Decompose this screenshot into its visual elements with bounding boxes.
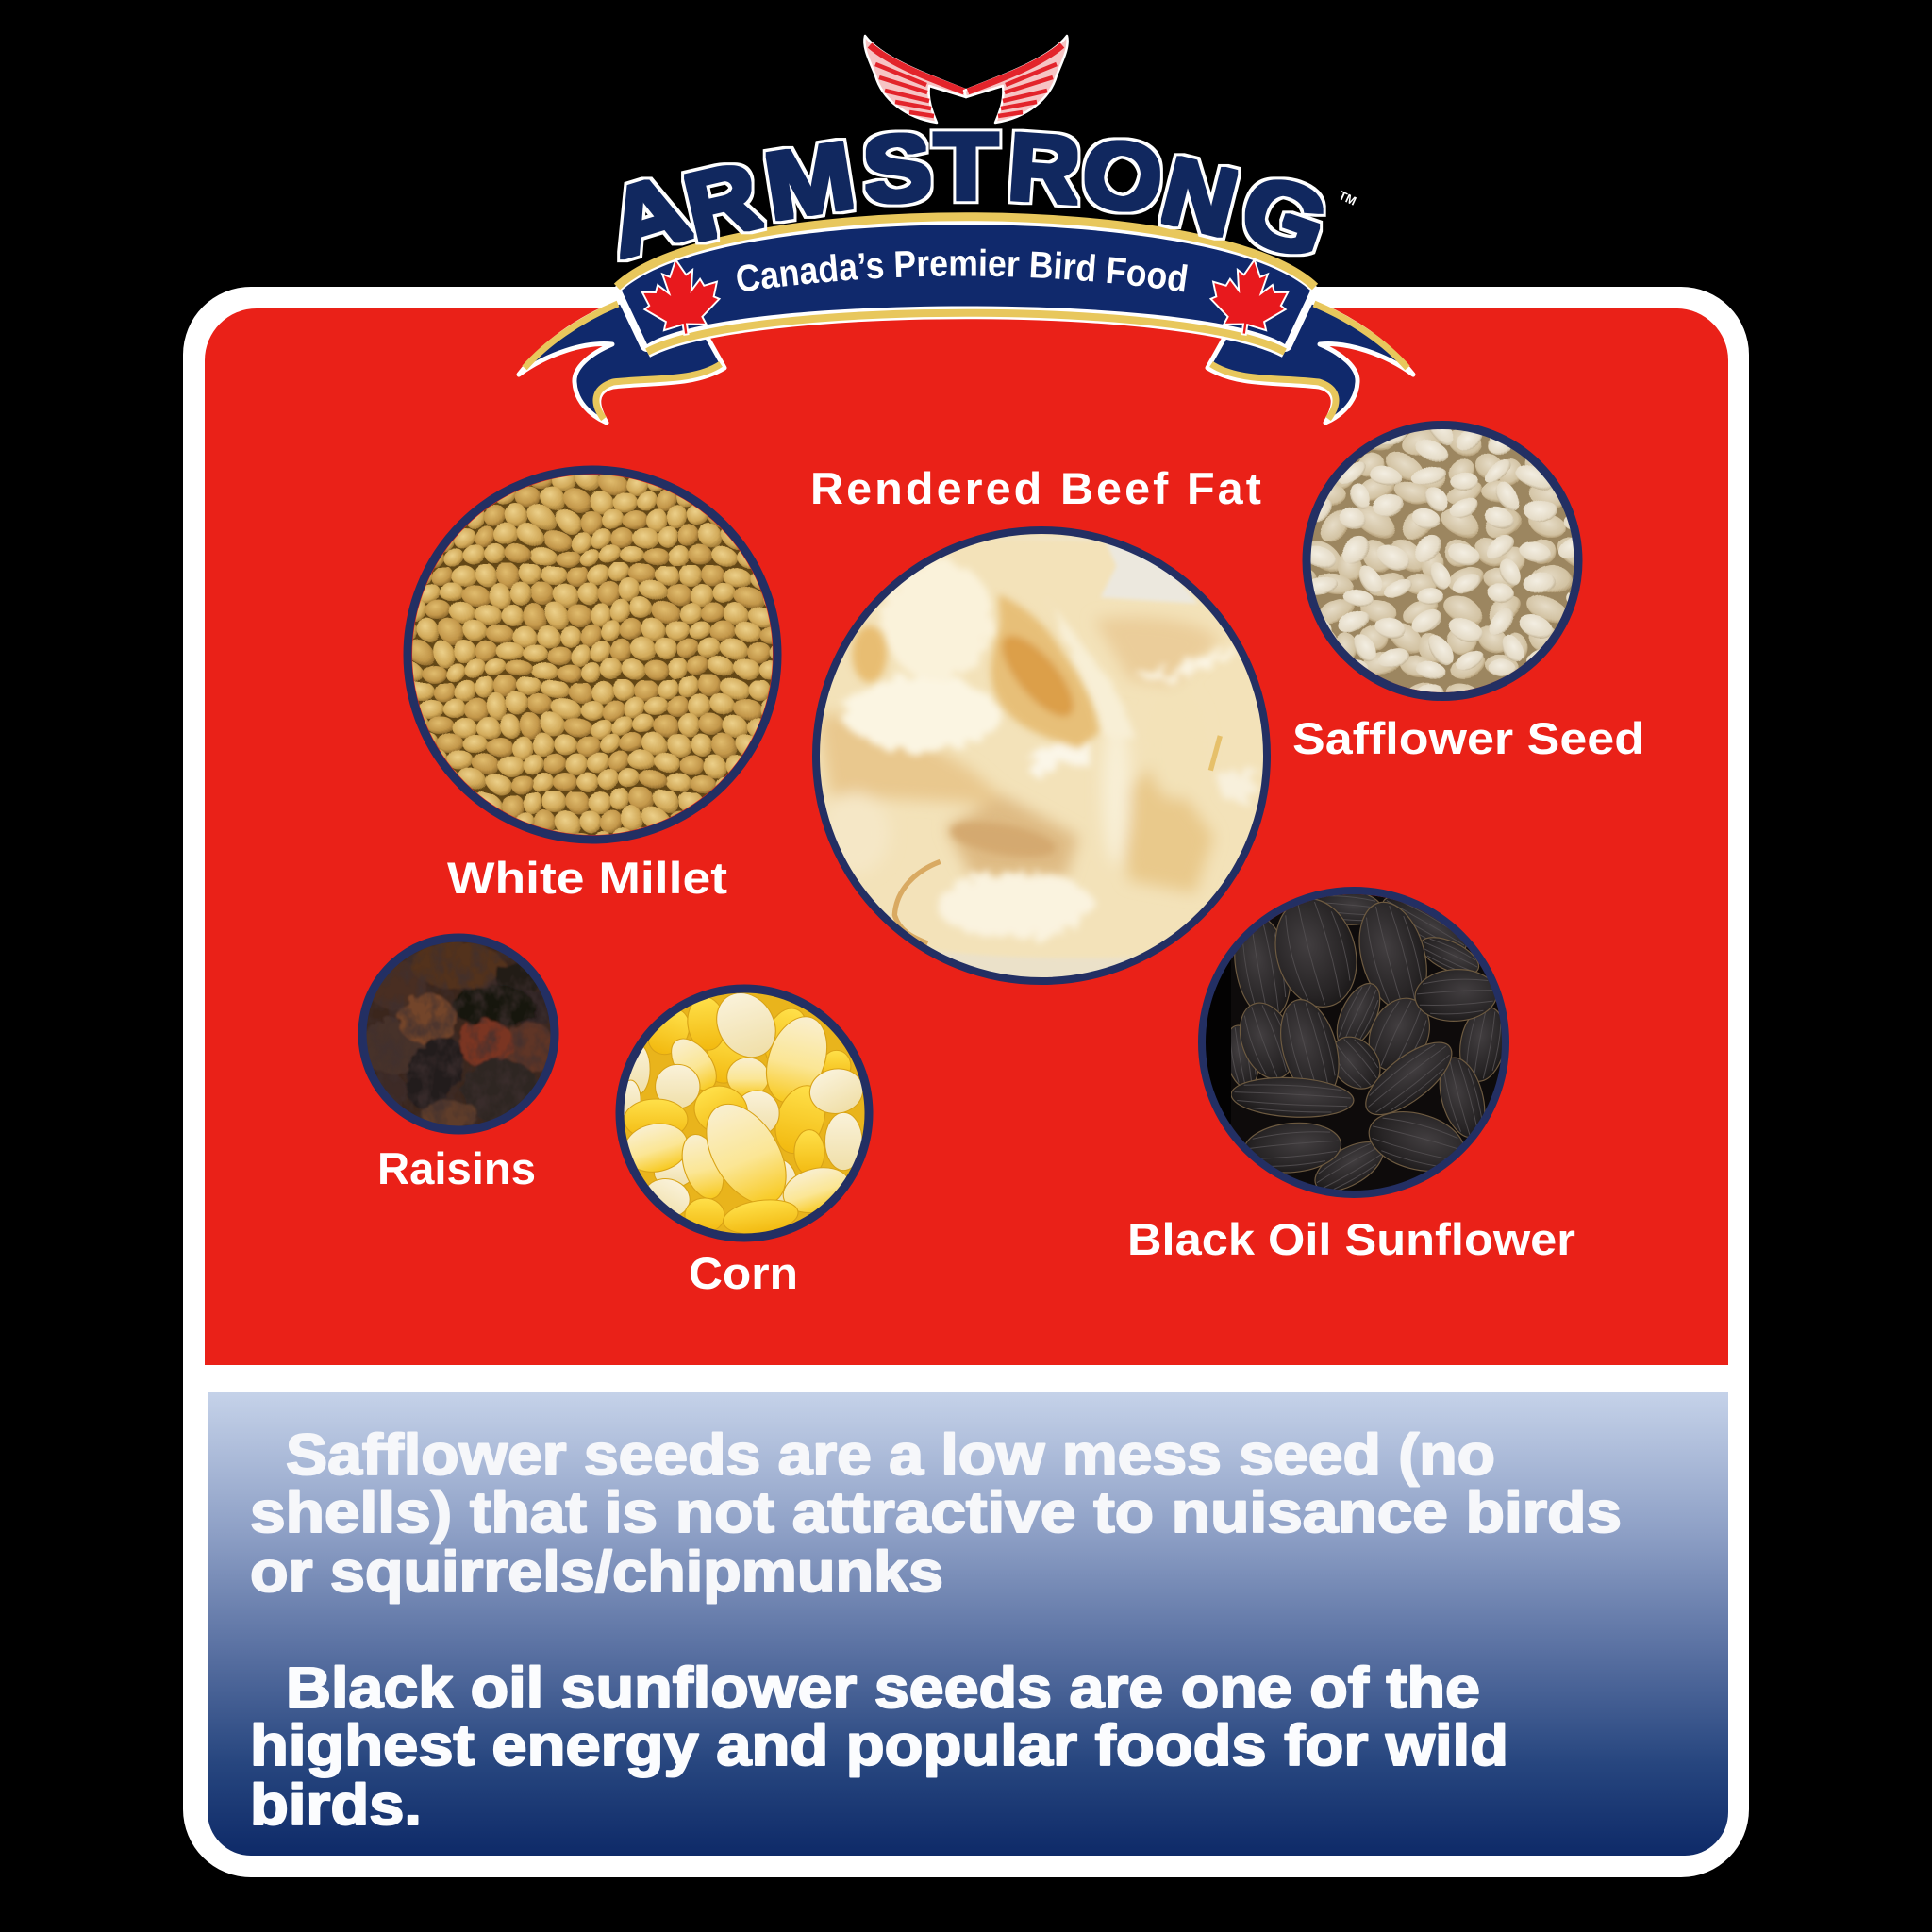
panel: red ingredients area — [205, 308, 1728, 1365]
icon: left maple leaf — [639, 255, 724, 340]
ribbon tails — [519, 300, 1413, 423]
wordmark: ARMSTRONG: S — [858, 114, 936, 225]
text: black oil sunflower note: birds. — [250, 1773, 422, 1837]
wordmark: ARMSTRONG: O — [1074, 119, 1170, 235]
label: rendered beef fat: Rendered Beef Fat — [810, 463, 1264, 513]
photo: raisins — [358, 934, 558, 1134]
wordmark: ARMSTRONG: N — [1152, 137, 1247, 257]
icon: red wings — [864, 36, 1068, 123]
panel: blue gradient text area — [208, 1392, 1728, 1856]
text: safflower note: or squirrels/chipmunks — [250, 1540, 943, 1604]
photo: rendered beef fat — [814, 528, 1271, 984]
panel: white frame — [183, 287, 1749, 1877]
text: black oil sunflower note: Black oil sunflower seeds are one of the — [286, 1656, 1480, 1720]
wordmark: ARMSTRONG: A — [594, 153, 700, 277]
photo: white millet — [396, 458, 789, 852]
trademark: TM — [1337, 188, 1358, 208]
text: safflower note: Safflower seeds are a low mess seed (no — [286, 1423, 1495, 1487]
text: safflower note: shells) that is not attractive to nuisance birds — [250, 1480, 1622, 1544]
icon: right maple leaf — [1207, 255, 1291, 340]
photo: corn — [616, 984, 873, 1242]
wordmark: ARMSTRONG: R — [1005, 113, 1084, 224]
tagline: Canada’s Premier Bird Food — [737, 249, 1188, 292]
infographic — [183, 34, 1749, 1877]
photo: black oil sunflower — [1198, 887, 1512, 1201]
label: raisins: Raisins — [377, 1143, 536, 1193]
wordmark: ARMSTRONG — [594, 113, 1341, 280]
wordmark: ARMSTRONG: T — [934, 115, 998, 220]
wordmark: ARMSTRONG: M — [758, 123, 861, 240]
logo: Armstrong — [517, 34, 1415, 425]
photo: safflower seed — [1297, 415, 1588, 706]
text: black oil sunflower note — [250, 1656, 1508, 1837]
label: corn: Corn — [689, 1248, 798, 1298]
wordmark: ARMSTRONG: G — [1228, 154, 1341, 280]
label: safflower seed: Safflower Seed — [1292, 713, 1644, 763]
ribbon banner — [617, 217, 1315, 352]
label: black oil sunflower: Black Oil Sunflower — [1127, 1214, 1575, 1264]
text: safflower note — [250, 1423, 1622, 1604]
label: white millet: White Millet — [447, 853, 727, 903]
wordmark: ARMSTRONG: R — [675, 142, 769, 261]
text: black oil sunflower note: highest energy and popular foods for wild — [250, 1713, 1508, 1777]
